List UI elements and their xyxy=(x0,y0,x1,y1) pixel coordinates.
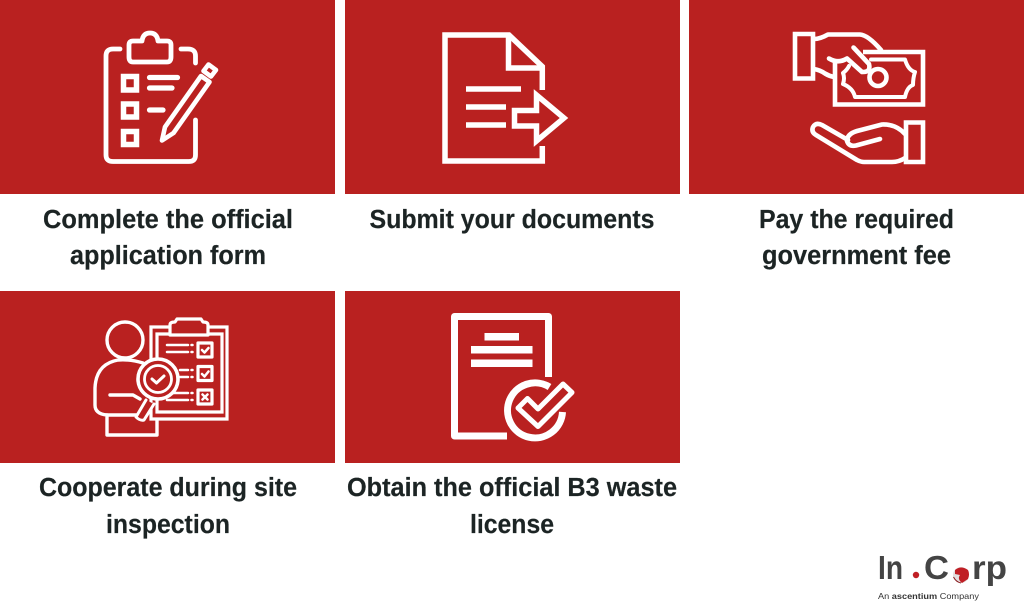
icon: globe xyxy=(953,567,969,583)
heading: step 2: Submit your documents xyxy=(370,206,654,234)
logo: InCorp: In xyxy=(878,549,903,586)
panel: step 3 pay fee xyxy=(689,0,1024,194)
heading: step 4: inspection xyxy=(106,511,230,539)
logo: InCorp: rp xyxy=(972,549,1007,586)
logo: InCorp: An ascentium Company xyxy=(878,591,980,601)
heading: step 1: application form xyxy=(70,242,266,270)
heading: step 4: Cooperate during site xyxy=(39,474,297,502)
heading: step 5: Obtain the official B3 waste xyxy=(347,474,677,502)
heading: step 3: Pay the required xyxy=(759,206,954,234)
heading: step 3: government fee xyxy=(762,242,951,270)
icon: clipboard with pencil xyxy=(106,33,216,162)
heading: step 5: license xyxy=(470,511,554,539)
heading: step 4 xyxy=(39,474,297,539)
panel: step 1 complete form xyxy=(0,0,335,194)
heading: step 5 xyxy=(347,474,677,539)
logo: InCorp xyxy=(878,549,1007,601)
panel: step 5 obtain license xyxy=(345,291,680,463)
icon: hands exchanging money xyxy=(795,34,923,162)
icon: document with arrow xyxy=(445,35,564,161)
logo: InCorp: C xyxy=(924,549,949,586)
heading: step 1: Complete the official xyxy=(43,206,293,234)
panel: step 2 submit documents xyxy=(345,0,680,194)
heading: step 3 xyxy=(759,206,954,270)
icon: license document with check xyxy=(454,316,572,438)
heading: step 1 xyxy=(43,206,293,270)
icon: inspector with checklist xyxy=(95,319,227,435)
panel: step 4 site inspection xyxy=(0,291,335,463)
